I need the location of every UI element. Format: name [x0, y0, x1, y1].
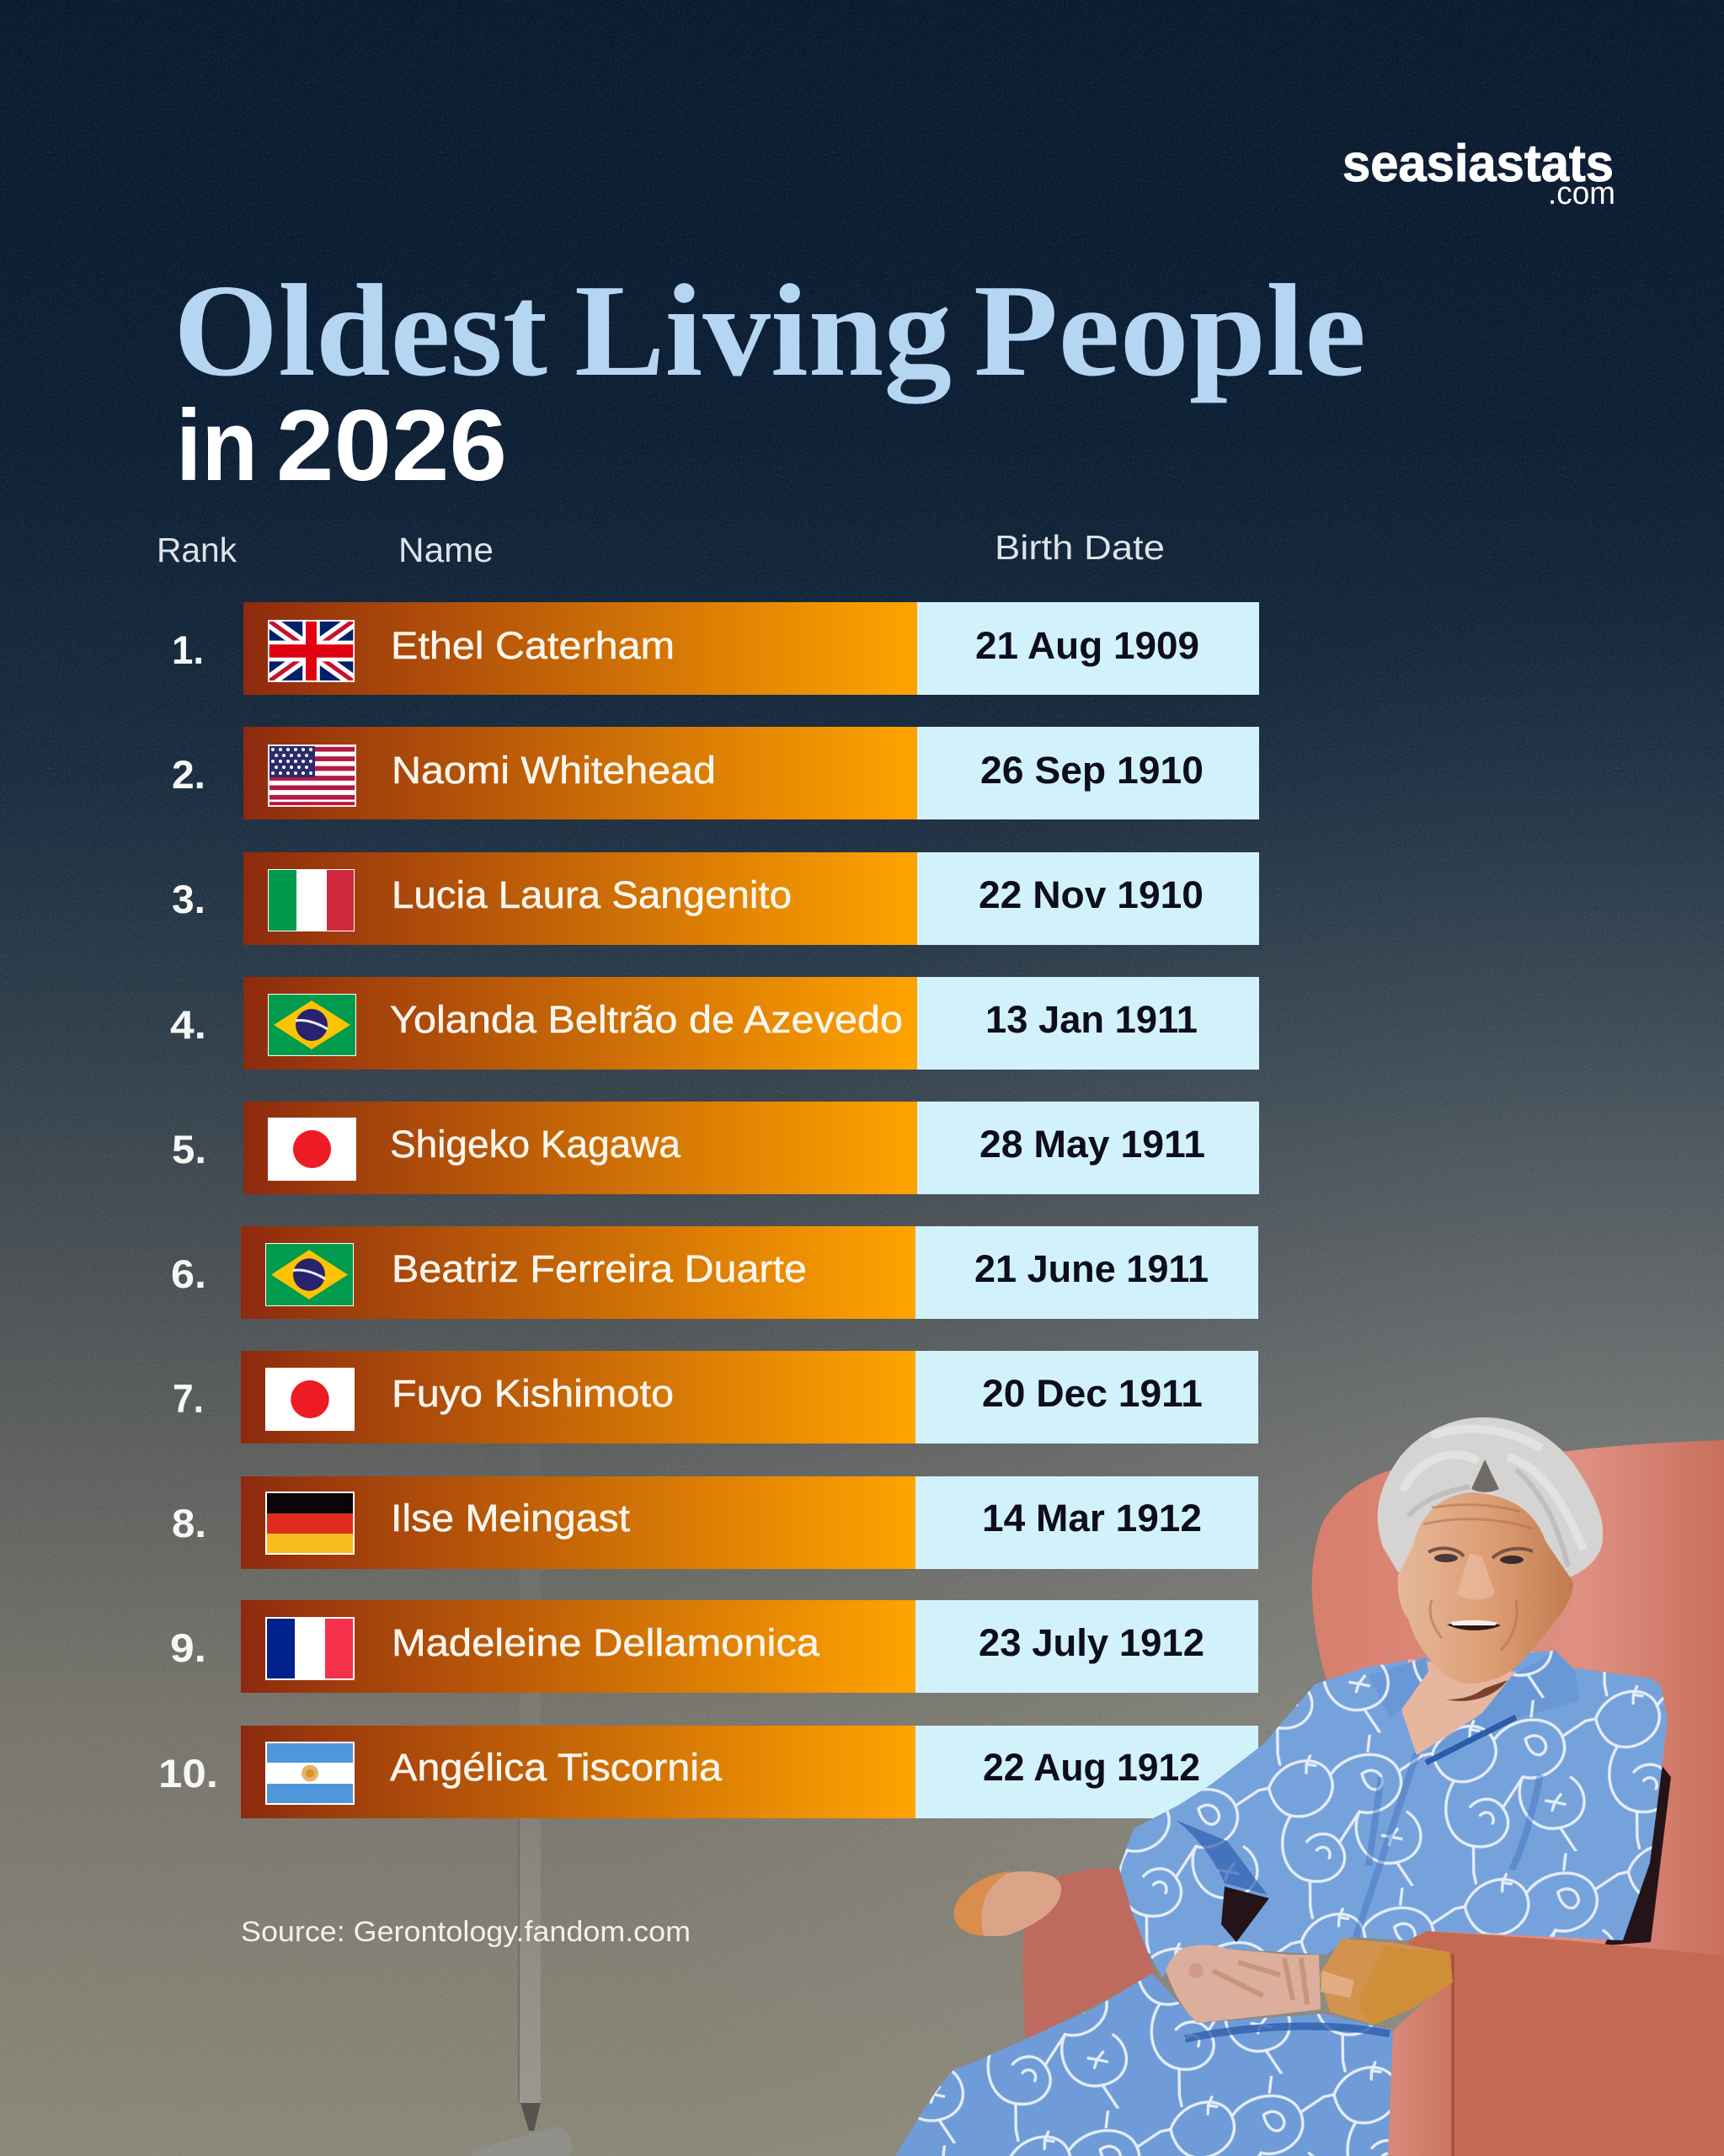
hair parting	[1471, 1460, 1499, 1492]
row 9: Madeleine Dellamonica: 9.	[170, 1625, 206, 1670]
flag: Japan	[265, 1368, 355, 1431]
row 2: Naomi Whitehead	[172, 727, 1259, 819]
row 7: Fuyo Kishimoto: 20 Dec 1911	[982, 1372, 1203, 1415]
row 8: Ilse Meingast: 8.	[172, 1501, 206, 1545]
column headers: Birth Date	[995, 528, 1165, 567]
row 6: Beatriz Ferreira Duarte: 6.	[171, 1251, 206, 1296]
title: in	[176, 389, 258, 502]
armchair left arm	[1022, 1868, 1156, 2040]
armrest pad left	[954, 1871, 1061, 1936]
photo: elderly woman seated in a pink armchair	[895, 1417, 1724, 2156]
title: Oldest	[173, 257, 547, 403]
shadow behind the torso	[1604, 1752, 1671, 1945]
column headers: Name	[398, 531, 494, 569]
row 8: Ilse Meingast: Ilse Meingast	[391, 1497, 631, 1540]
source note: Source: Gerontology.fandom.com	[241, 1916, 691, 1948]
row 1: Ethel Caterham: 1.	[172, 627, 204, 672]
title	[173, 257, 1366, 502]
wall pipe	[472, 1415, 572, 2156]
row 3: Lucia Laura Sangenito: Lucia Laura Sangenito	[392, 873, 792, 916]
dress skirt	[895, 1973, 1393, 2156]
armchair back	[1312, 1440, 1724, 1971]
row 4: Yolanda Beltrão de Azevedo	[170, 977, 1259, 1070]
neck	[1401, 1659, 1516, 1755]
hair	[1378, 1417, 1603, 1577]
logo: seasiastats.com: seasiastats	[1342, 135, 1614, 193]
flag: United Kingdom	[268, 620, 355, 682]
row 2: Naomi Whitehead: 2.	[172, 752, 205, 797]
flag: Argentina	[265, 1742, 355, 1805]
row 2: Naomi Whitehead: Naomi Whitehead	[392, 749, 716, 792]
row 10: Angélica Tiscornia: 10.	[158, 1751, 218, 1796]
row 9: Madeleine Dellamonica	[170, 1600, 1258, 1693]
collar band shadow	[1426, 1717, 1516, 1763]
row 9: Madeleine Dellamonica: Madeleine Dellamonica	[392, 1621, 820, 1664]
flag: Italy	[268, 869, 355, 931]
row 7: Fuyo Kishimoto: 7.	[173, 1376, 204, 1421]
row 9: Madeleine Dellamonica: 23 July 1912	[979, 1621, 1204, 1664]
title: 2026	[276, 389, 507, 502]
hands	[1166, 1945, 1321, 2023]
dark gap between arm and body	[1221, 1886, 1269, 1942]
row 4: Yolanda Beltrão de Azevedo: Yolanda Beltrão de Azevedo	[390, 998, 903, 1041]
row 6: Beatriz Ferreira Duarte: Beatriz Ferreira Duarte	[392, 1247, 807, 1290]
row 1: Ethel Caterham	[172, 602, 1259, 695]
flag: Brazil	[268, 994, 356, 1056]
row 10: Angélica Tiscornia: 22 Aug 1912	[983, 1746, 1200, 1789]
row 10: Angélica Tiscornia	[158, 1726, 1258, 1818]
row 5: Shigeko Kagawa	[172, 1102, 1259, 1194]
row 1: Ethel Caterham: Ethel Caterham	[391, 624, 675, 667]
column headers: Rank	[157, 531, 237, 569]
flag: France	[265, 1617, 355, 1680]
armchair right arm	[1388, 1931, 1724, 2156]
collar	[1369, 1651, 1579, 1760]
row 6: Beatriz Ferreira Duarte	[171, 1226, 1258, 1319]
row 5: Shigeko Kagawa: 5.	[172, 1127, 206, 1171]
row 8: Ilse Meingast: 14 Mar 1912	[982, 1497, 1202, 1540]
dress top and sleeve	[1119, 1651, 1668, 1977]
flag: Japan	[268, 1118, 356, 1181]
row 6: Beatriz Ferreira Duarte: 21 June 1911	[974, 1247, 1209, 1290]
row 4: Yolanda Beltrão de Azevedo: 13 Jan 1911	[985, 998, 1198, 1041]
row 5: Shigeko Kagawa: 28 May 1911	[979, 1123, 1205, 1166]
row 4: Yolanda Beltrão de Azevedo: 4.	[170, 1002, 206, 1047]
row 7: Fuyo Kishimoto: Fuyo Kishimoto	[392, 1372, 674, 1415]
row 2: Naomi Whitehead: 26 Sep 1910	[980, 749, 1204, 792]
flag: United States	[268, 744, 356, 807]
flag: Brazil	[265, 1243, 354, 1306]
flag: Germany	[265, 1492, 355, 1555]
face	[1398, 1492, 1573, 1684]
sleeve fold shadow	[1176, 1820, 1268, 1895]
title: Living	[574, 257, 952, 404]
logo: seasiastats.com: .com	[1548, 176, 1615, 211]
row 3: Lucia Laura Sangenito	[172, 852, 1259, 945]
row 3: Lucia Laura Sangenito: 3.	[172, 877, 205, 921]
row 10: Angélica Tiscornia: Angélica Tiscornia	[390, 1746, 723, 1789]
row 5: Shigeko Kagawa: Shigeko Kagawa	[390, 1123, 681, 1166]
row 1: Ethel Caterham: 21 Aug 1909	[975, 624, 1199, 667]
row 3: Lucia Laura Sangenito: 22 Nov 1910	[979, 873, 1204, 916]
row 8: Ilse Meingast	[172, 1476, 1258, 1569]
row 7: Fuyo Kishimoto	[173, 1351, 1258, 1444]
column headers	[157, 528, 1165, 569]
armrest pad right	[1319, 1939, 1453, 2025]
title: People	[974, 257, 1366, 403]
